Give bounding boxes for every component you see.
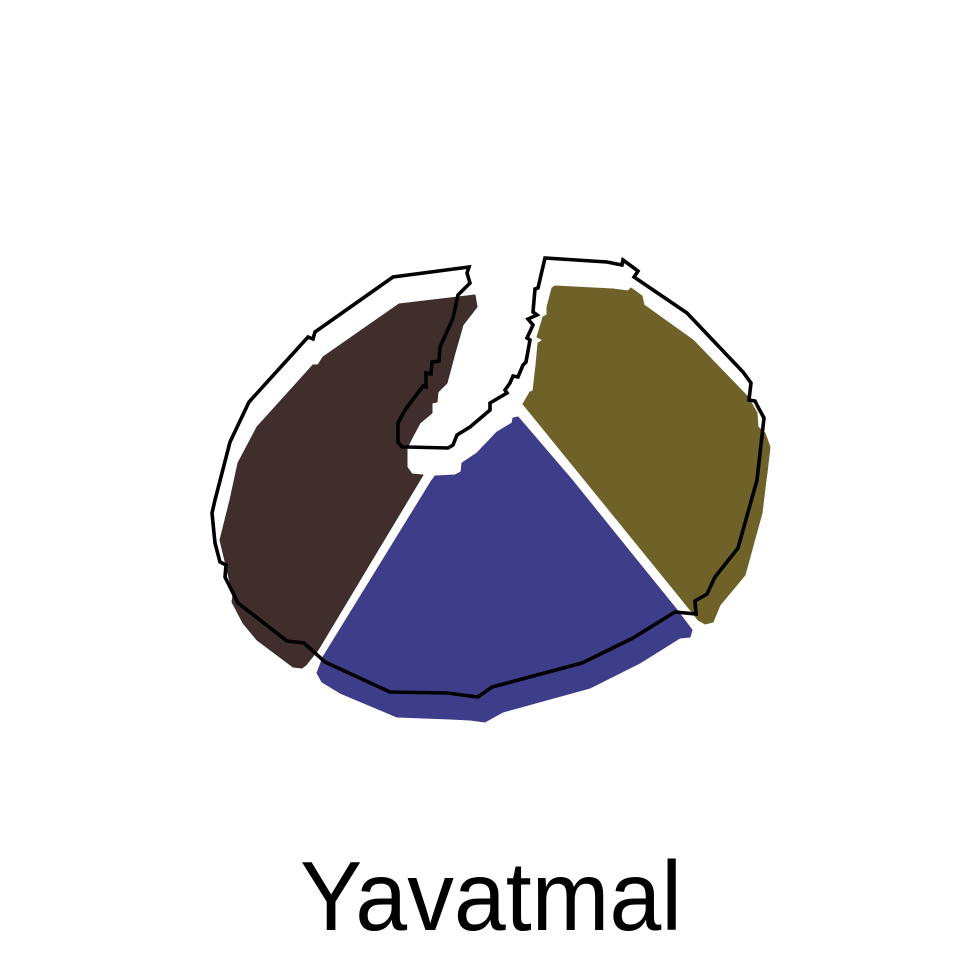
- map region: olive eastern segment: [523, 286, 770, 624]
- title: Yavatmal: Yavatmal: [300, 841, 682, 951]
- map region: blue southern segment: [317, 417, 692, 722]
- map region: brown western segment: [220, 295, 477, 668]
- map outline: black district border: [212, 258, 764, 697]
